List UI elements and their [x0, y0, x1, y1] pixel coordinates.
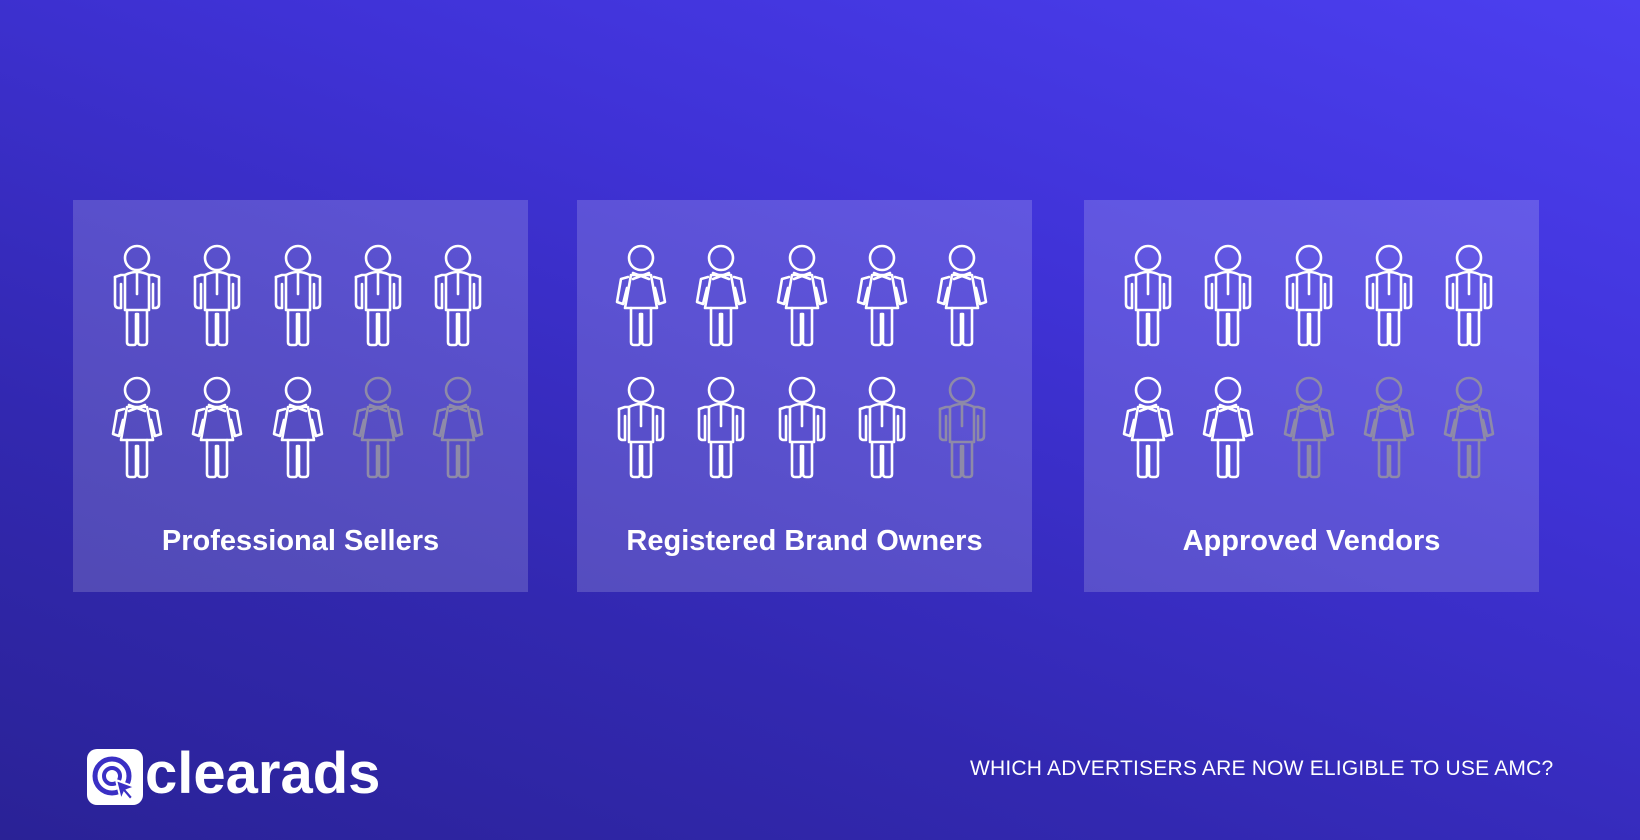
figure grid: 7 of 10	[1122, 244, 1494, 478]
figure grid: 8 of 10	[112, 244, 484, 478]
footer question: WHICH ADVERTISERS ARE NOW ELIGIBLE TO USE AMC?	[970, 757, 1553, 780]
figure grid: 9 of 10	[616, 244, 988, 478]
panel: registered brand owners	[577, 200, 1032, 592]
label: Approved Vendors	[1183, 525, 1440, 557]
panel: approved vendors	[1084, 200, 1539, 592]
label: Professional Sellers	[162, 525, 439, 557]
wordmark: clearads	[145, 741, 380, 806]
icon: target cursor	[87, 749, 143, 805]
panel: professional sellers	[73, 200, 528, 592]
logo: clearads	[87, 741, 380, 806]
label: Registered Brand Owners	[626, 525, 983, 557]
